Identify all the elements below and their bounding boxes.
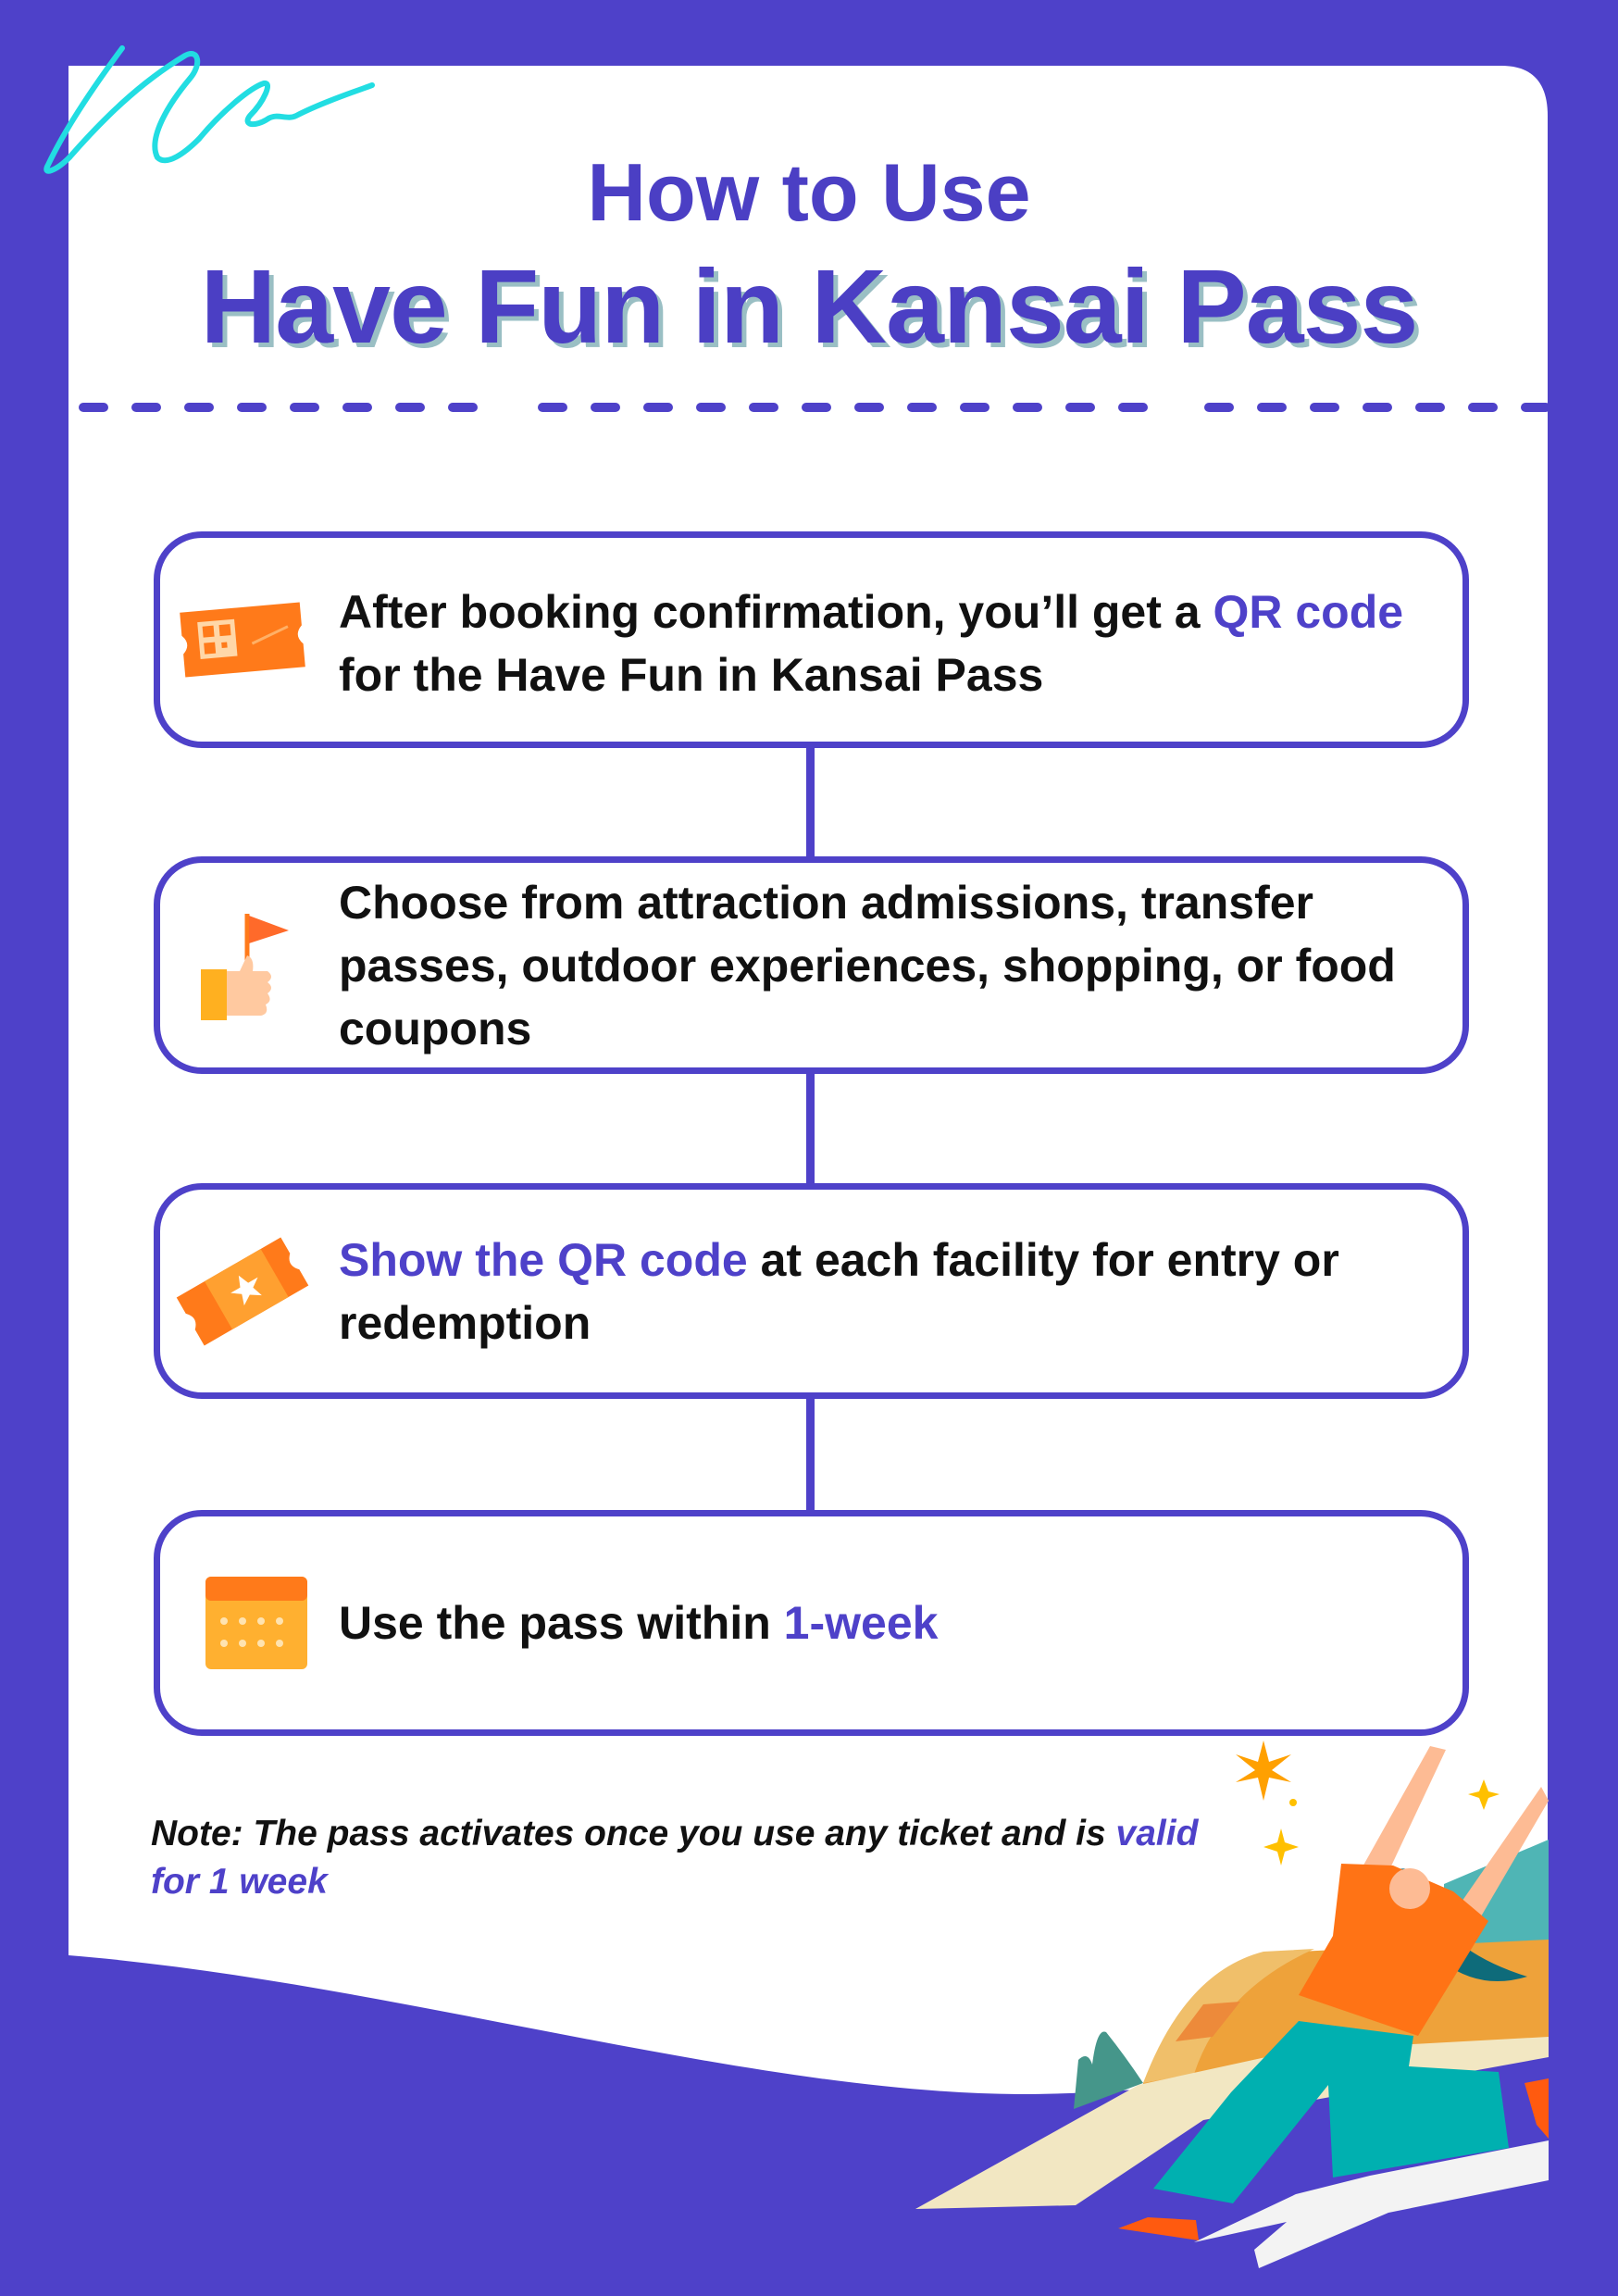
text: step 3: [339, 1234, 1339, 1349]
icon: QR ticket: [180, 602, 305, 678]
connectors: [806, 748, 815, 861]
text: step 1: [339, 586, 1403, 701]
icon: calendar: [205, 1577, 307, 1669]
building: [1444, 1840, 1549, 1953]
stars: [1236, 1741, 1291, 1801]
step 2: [154, 856, 1469, 1074]
icon: thumbs up flag: [201, 914, 289, 1020]
text: step 2: Choose from attraction admissions, transfer: [339, 877, 1313, 929]
title: Have Fun in Kansai Pass: [201, 248, 1417, 365]
bush: [1074, 2031, 1143, 2109]
note: for 1 week: [151, 1862, 328, 1902]
pants: [1153, 2021, 1509, 2203]
step 1: [154, 531, 1469, 748]
step 3: [154, 1183, 1469, 1399]
icon: star ticket: [176, 1237, 309, 1346]
head: [1389, 1868, 1430, 1909]
title: How to Use: [587, 146, 1031, 238]
illustration: girl jumping with train: [915, 1741, 1549, 2268]
arms: [1361, 1746, 1446, 1872]
text: step 2: coupons: [339, 1003, 531, 1054]
text: step 3: Show the QR code at each facility for entry or: [339, 1234, 1339, 1286]
train: [1143, 1940, 1549, 2088]
title: [201, 146, 1419, 365]
white splash: [1194, 2140, 1549, 2268]
text: step 2: passes, outdoor experiences, shopping, or food: [339, 940, 1396, 992]
road: [915, 2037, 1549, 2209]
text: step 1: for the Have Fun in Kansai Pass: [339, 649, 1043, 701]
text: step 3: redemption: [339, 1297, 591, 1349]
step 4: [154, 1510, 1469, 1736]
shoes: [1118, 2217, 1199, 2240]
text: step 2: [339, 877, 1396, 1054]
text: step 1: After booking confirmation, you’ll get a QR code: [339, 586, 1403, 638]
shirt: [1299, 1864, 1488, 2036]
note: [151, 1814, 1200, 1902]
text: step 4: Use the pass within 1-week: [339, 1597, 938, 1649]
note: Note: The pass activates once you use any ticket and is valid: [151, 1814, 1198, 1853]
scribble decoration: [44, 45, 375, 174]
hair: [1393, 1868, 1527, 1981]
dashed divider: [79, 403, 1548, 412]
